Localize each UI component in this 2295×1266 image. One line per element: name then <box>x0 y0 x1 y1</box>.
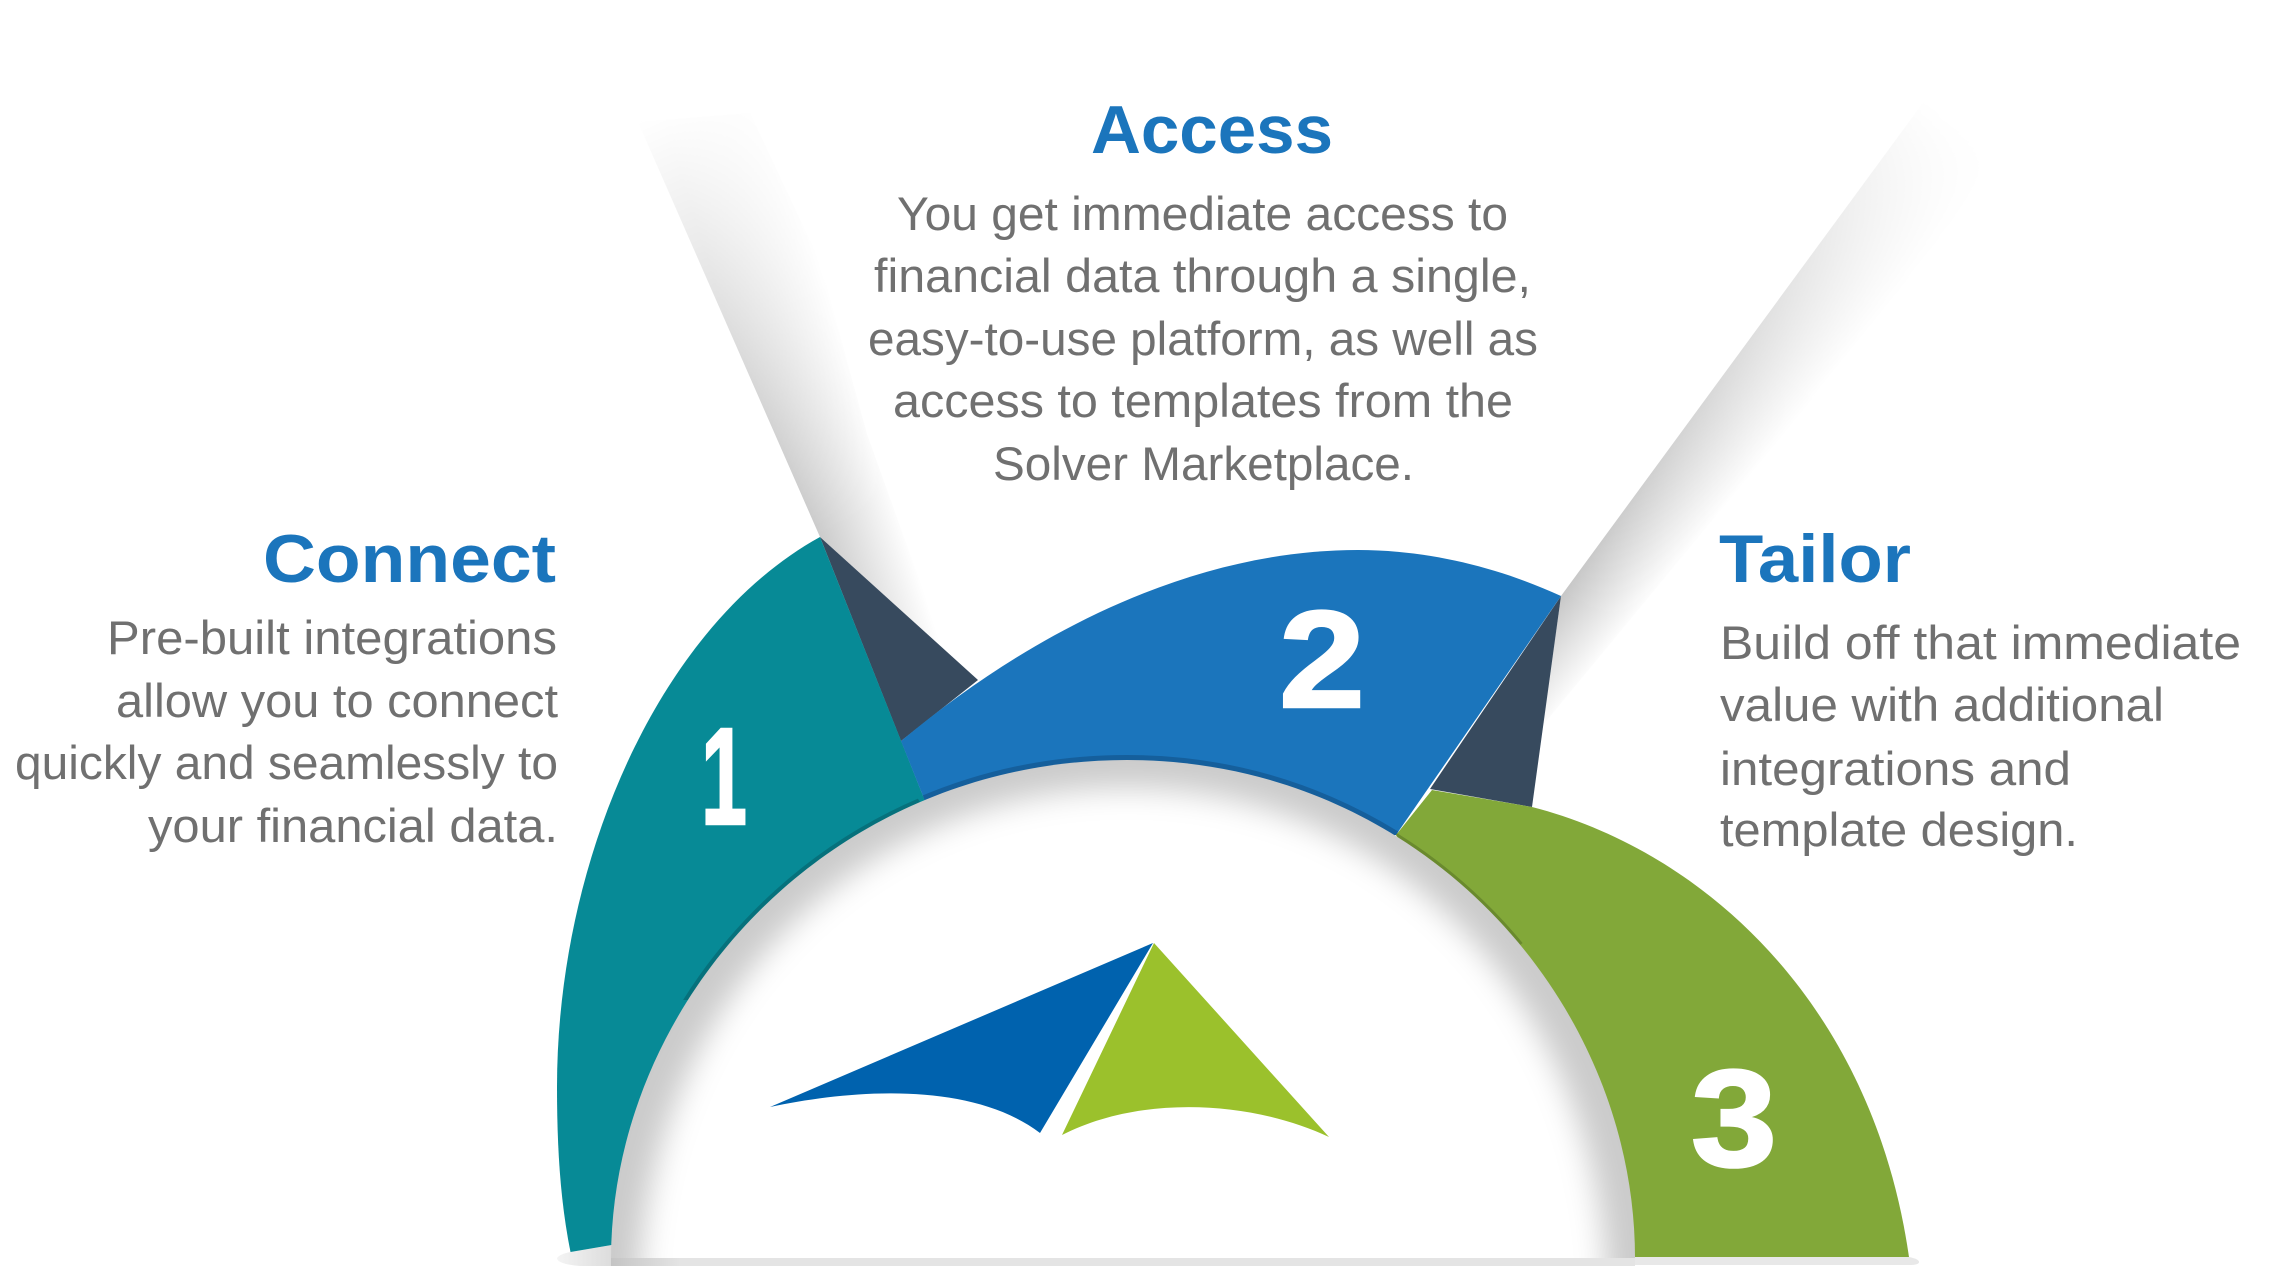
heading: Access: Access <box>1091 92 1333 168</box>
text: Tailor description: Build off that immediate <box>1720 616 2241 669</box>
band 3: green tailor segment <box>1396 790 1909 1257</box>
dark fold: connect to access <box>820 537 978 741</box>
dark fold: access to tailor <box>1430 596 1561 807</box>
central dome with inner shadow <box>600 750 1650 1266</box>
ground shadow <box>557 1245 1919 1266</box>
logo <box>770 943 1329 1137</box>
number 2: 2 <box>1279 583 1365 737</box>
text: Access description: access to templates from the <box>893 374 1513 427</box>
band 1: teal connect segment <box>557 537 924 1252</box>
text: Connect description <box>15 611 558 852</box>
text: Access description <box>868 187 1538 490</box>
text: Tailor description: value with additional <box>1720 678 2164 731</box>
number 1: 1 <box>701 700 747 854</box>
number 3: 3 <box>1691 1042 1777 1196</box>
text: Tailor description: integrations and <box>1720 742 2071 795</box>
text: Access description: Solver Marketplace. <box>993 437 1414 490</box>
text: Tailor description: template design. <box>1720 803 2078 856</box>
text: Connect description: Pre-built integrations <box>107 611 557 664</box>
text: Access description: easy-to-use platform, as well as <box>868 312 1538 365</box>
text: Access description: You get immediate access to <box>897 187 1508 240</box>
heading: Tailor: Tailor <box>1719 521 1911 597</box>
shadow beam: right <box>1545 155 1891 712</box>
shadow beam: left <box>662 166 922 628</box>
text: Connect description: allow you to connect <box>116 674 558 727</box>
text: Tailor description <box>1720 616 2241 856</box>
text: Connect description: your financial data. <box>148 799 558 852</box>
heading: Connect: Connect <box>263 521 556 597</box>
band 2: blue access segment <box>901 550 1561 836</box>
text: Access description: financial data through a single, <box>874 249 1531 302</box>
text: Connect description: quickly and seamlessly to <box>15 736 558 789</box>
